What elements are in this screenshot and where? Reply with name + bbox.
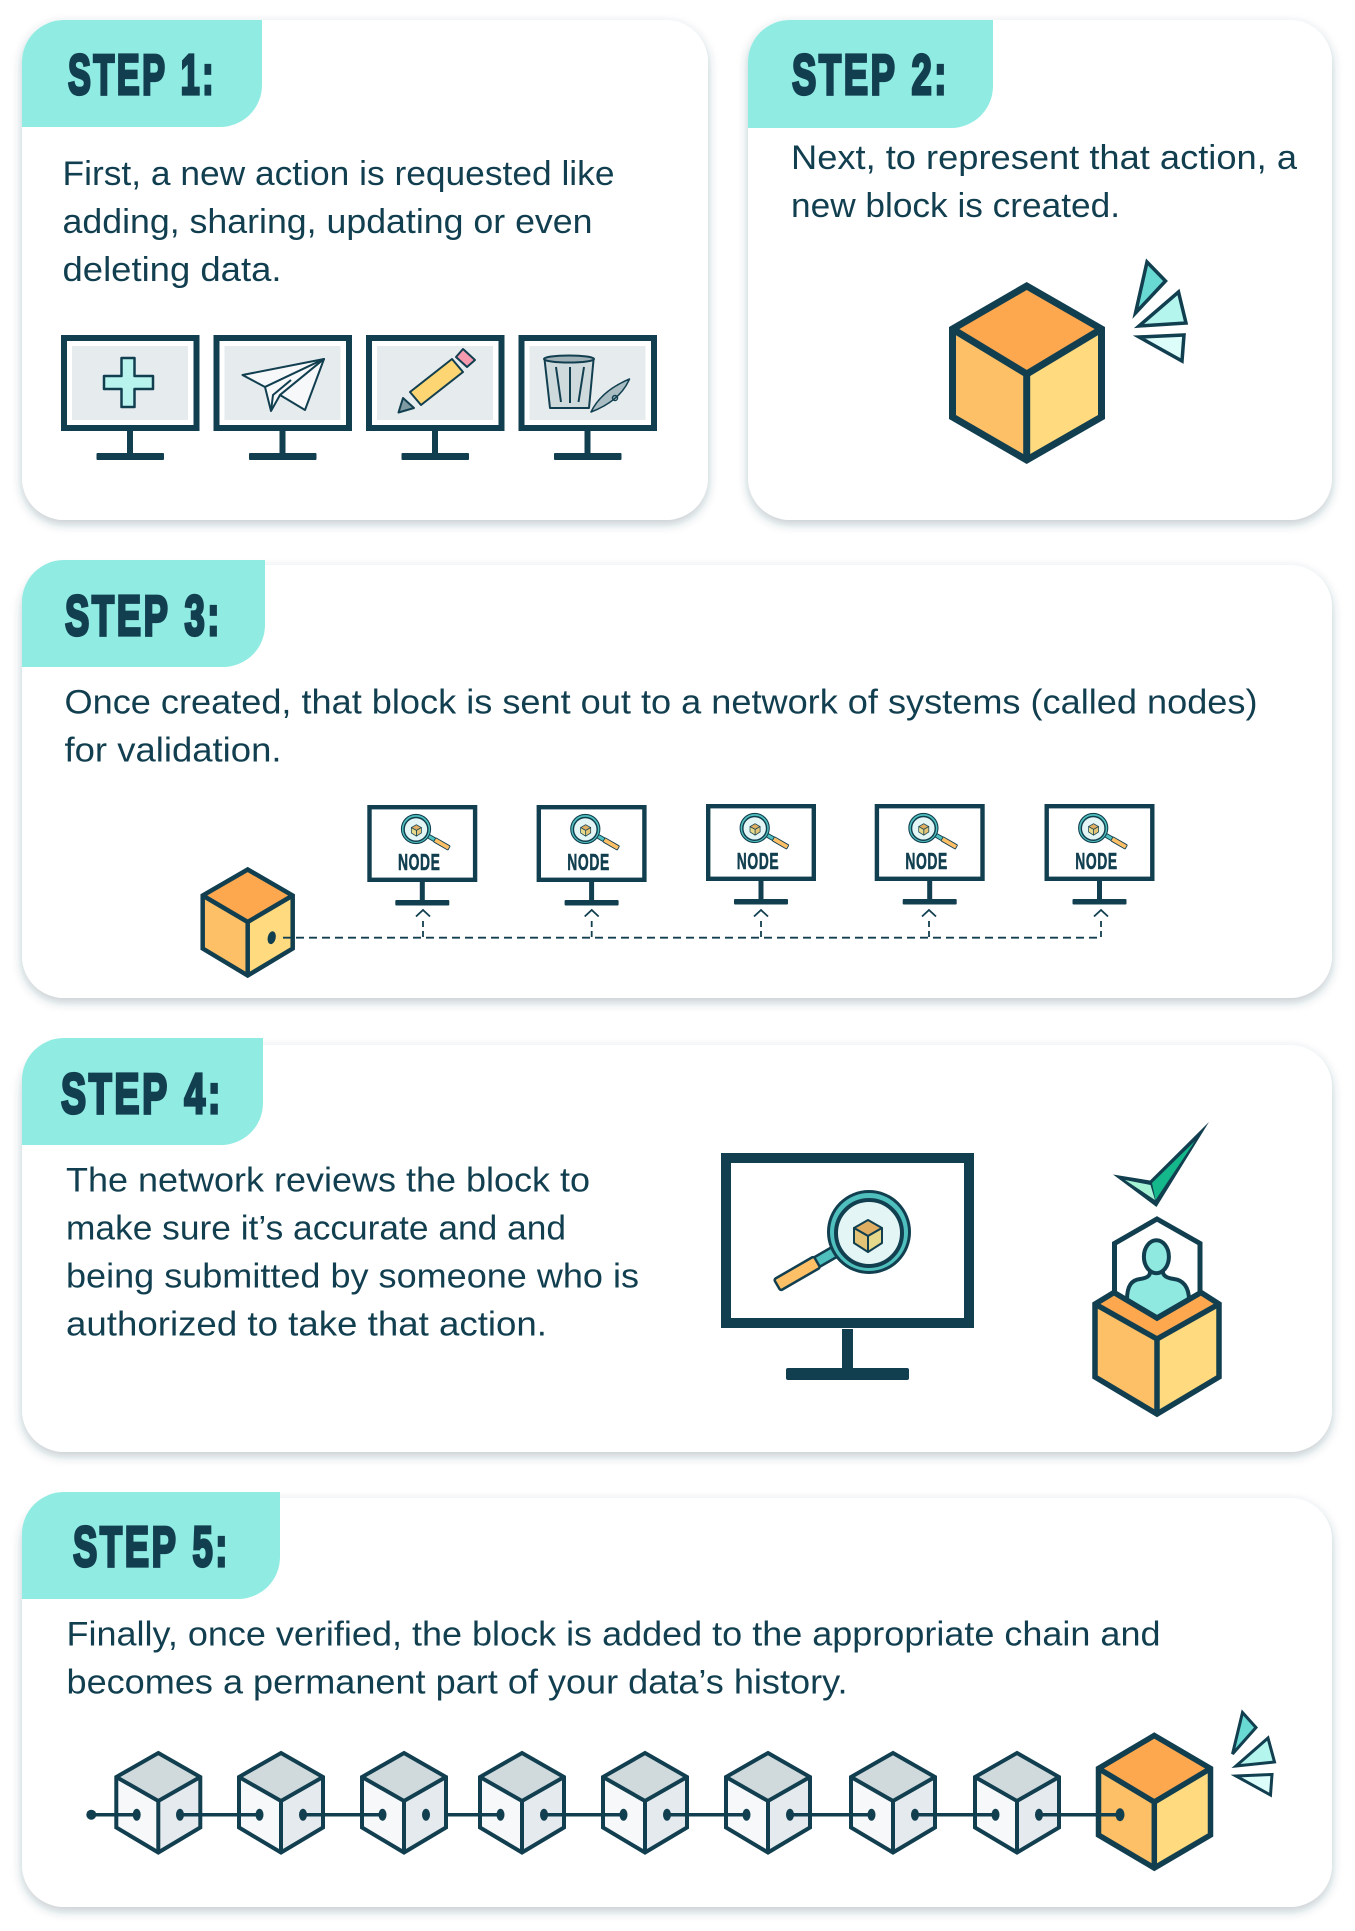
step 4 text: being submitted by someone who is [66, 1258, 639, 1296]
step 4 text: The network reviews the block to [66, 1162, 590, 1200]
icon: block sent to network [203, 870, 293, 976]
panel: step 5 [22, 1492, 1332, 1907]
icon: monitor with magnifier [726, 1158, 969, 1380]
panel: step 4 [22, 1038, 1332, 1452]
node 4 [877, 806, 982, 938]
step 2 heading tab: STEP 2: [792, 43, 949, 107]
step 1 text [62, 155, 614, 289]
node 2: NODE [567, 849, 610, 875]
step 4 text [66, 1162, 639, 1344]
node 1: NODE [398, 849, 440, 875]
step 5 text: becomes a permanent part of your data’s history. [66, 1664, 848, 1702]
node 5 [1047, 806, 1152, 938]
step 5 text [66, 1616, 1160, 1702]
step 5 heading tab: STEP 5: [73, 1515, 230, 1579]
icon: person in block [1095, 1219, 1219, 1414]
step 3 heading tab [22, 560, 265, 667]
step 2 text [791, 139, 1297, 225]
step 2 heading tab [748, 20, 993, 128]
node 5: NODE [1075, 848, 1118, 874]
node 4: NODE [905, 848, 948, 874]
icon: sparkle triangles [1136, 262, 1186, 361]
node 2 [539, 807, 644, 938]
step 1 heading tab [22, 20, 262, 127]
step 1 text: First, a new action is requested like [62, 155, 614, 193]
step 3 text: for validation. [64, 732, 282, 770]
step 3 text: Once created, that block is sent out to a network of systems (called nodes) [64, 684, 1258, 722]
icon: monitor with paper plane [216, 338, 349, 460]
node 3: NODE [737, 848, 779, 874]
node 1 [370, 807, 475, 938]
step 4 text: authorized to take that action. [66, 1306, 547, 1344]
chain of blocks [86, 1753, 1120, 1852]
icon: sparkle triangles [1232, 1712, 1274, 1795]
panel: step 1 [22, 20, 708, 520]
step 5 heading tab [22, 1492, 280, 1599]
step 4 text: make sure it’s accurate and and [66, 1210, 566, 1248]
step 3 text [64, 684, 1258, 770]
icon: new orange block in chain [1098, 1736, 1210, 1868]
step 4 heading tab: STEP 4: [61, 1062, 223, 1126]
node 3 [708, 806, 814, 938]
panel: step 2 [748, 20, 1332, 520]
icon: monitor with pencil [369, 338, 502, 460]
step 5 text: Finally, once verified, the block is added to the appropriate chain and [66, 1616, 1160, 1654]
step 1 text: deleting data. [62, 251, 282, 289]
step 1 text: adding, sharing, updating or even [62, 203, 592, 241]
step 2 text: new block is created. [791, 187, 1120, 225]
step 4 heading tab [22, 1038, 263, 1145]
step 2 text: Next, to represent that action, a [791, 139, 1297, 177]
step 3 heading tab: STEP 3: [65, 584, 222, 648]
dashed network line [283, 937, 1101, 939]
step 1 heading tab: STEP 1: [68, 43, 216, 107]
icon: orange block [952, 286, 1102, 460]
panel: step 3 [22, 560, 1332, 998]
icon: monitor with trash and feather [522, 338, 654, 460]
icon: check mark [1113, 1122, 1209, 1207]
icon: monitor with plus [64, 338, 196, 460]
